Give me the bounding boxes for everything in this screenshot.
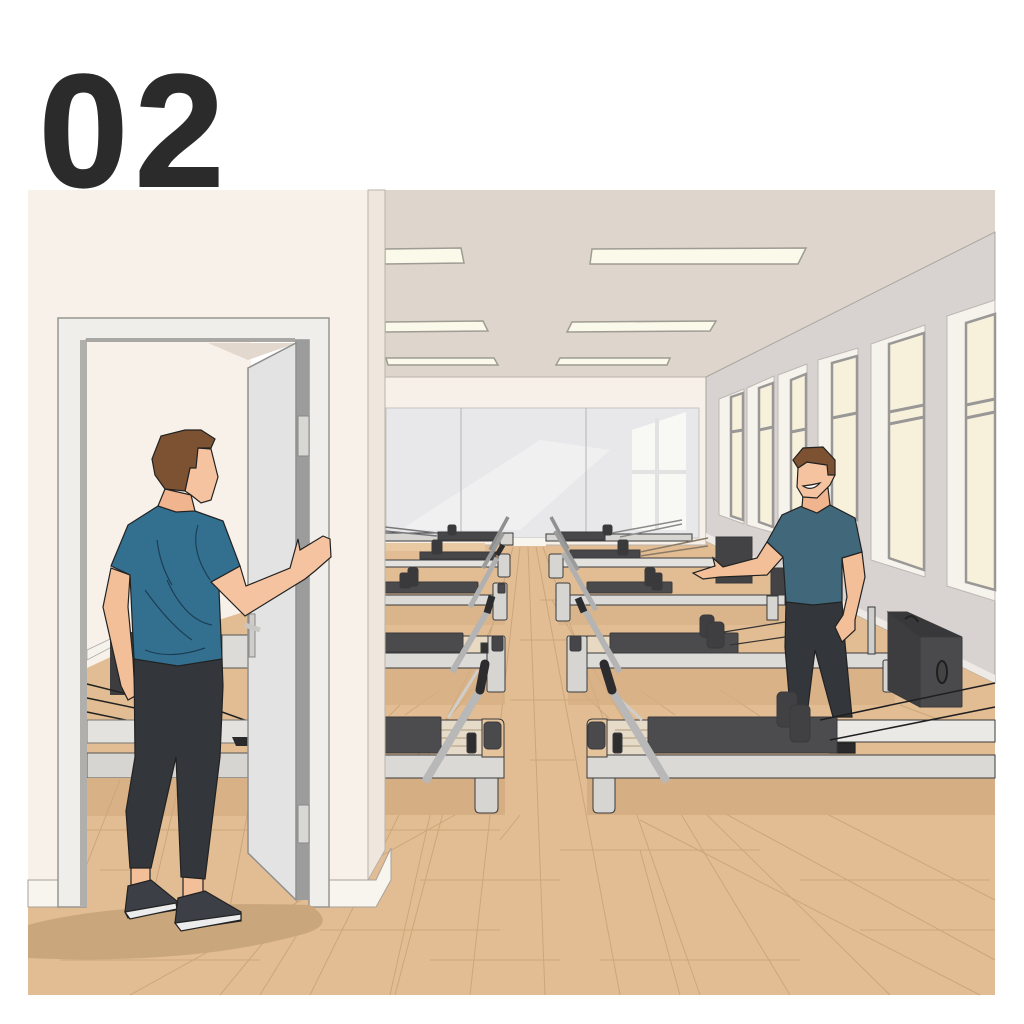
- reformer L0: [385, 664, 504, 813]
- back baseboard: [513, 538, 546, 546]
- ceiling lights: [385, 248, 806, 365]
- legs: [785, 602, 852, 717]
- baseboard of right wall: [706, 533, 995, 683]
- panel: studio scene: [28, 190, 995, 995]
- reformer R2: [556, 553, 787, 621]
- right wall: [706, 232, 995, 683]
- reformers: left column: [385, 517, 513, 813]
- neck: [802, 488, 830, 513]
- shoes: [125, 880, 241, 931]
- front wall with doorway: [28, 190, 368, 907]
- floor shadows of reformers: [385, 778, 995, 815]
- socks: [131, 866, 203, 898]
- face: [797, 462, 835, 498]
- hair: [793, 447, 835, 475]
- reformer L4: [385, 517, 513, 550]
- shirt: [111, 506, 240, 666]
- extended arm: [211, 536, 331, 616]
- step number: 02: [39, 41, 231, 220]
- foot: [830, 743, 855, 753]
- extended arm: [693, 542, 783, 579]
- pillar side: [368, 190, 385, 880]
- back arm: [103, 568, 135, 700]
- door handle: [245, 614, 260, 657]
- smile: [803, 483, 820, 488]
- reformer L3: [385, 533, 510, 577]
- mirror: [386, 408, 699, 538]
- shirt: [767, 505, 862, 605]
- side arm: [835, 552, 865, 642]
- door frame: [58, 318, 329, 907]
- floor: [28, 540, 995, 995]
- face: [185, 448, 218, 503]
- door: [245, 340, 309, 900]
- windows: [719, 300, 995, 601]
- ceiling: [385, 190, 995, 377]
- reformer R1: [567, 598, 897, 692]
- storage box: [888, 612, 962, 707]
- reformer L1: [385, 596, 505, 692]
- floor shadow of visitor: [28, 904, 323, 959]
- storage box back: [716, 537, 752, 583]
- back wall: [385, 377, 706, 545]
- person: instructor: [693, 447, 865, 753]
- shirt folds: [145, 525, 212, 655]
- reformer L2: [385, 558, 507, 620]
- trousers: [126, 659, 223, 879]
- person: visitor: [103, 430, 331, 931]
- reformer R3: [549, 531, 716, 578]
- neck: [158, 489, 195, 512]
- hair: [152, 430, 215, 491]
- left baseboard: [28, 880, 59, 907]
- doorway interior: [70, 342, 297, 908]
- front reformer: right: [587, 664, 995, 813]
- reformers: right column: [546, 517, 962, 707]
- reformer R4: [546, 517, 692, 549]
- right baseboard: [329, 848, 391, 907]
